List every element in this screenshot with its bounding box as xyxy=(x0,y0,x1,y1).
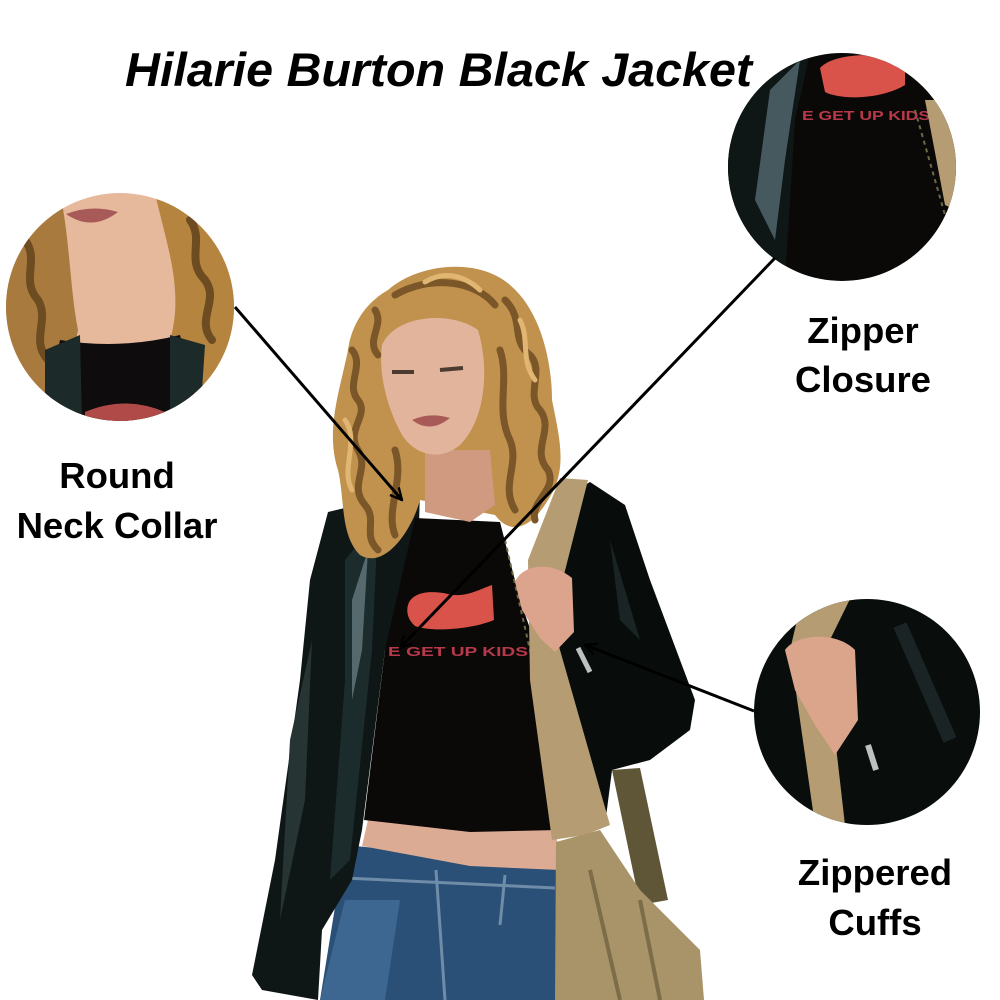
detail circle: zippered cuffs xyxy=(754,599,980,825)
arrow: zipper xyxy=(400,258,775,648)
bag strap and body xyxy=(528,478,610,840)
tee graphic xyxy=(407,585,494,629)
hair curls xyxy=(352,283,550,550)
arrow: collar xyxy=(235,307,402,500)
label: zipper closure: Zipper xyxy=(807,310,919,351)
jacket right sleeve xyxy=(548,482,695,830)
label: zippered cuffs: Cuffs xyxy=(828,902,922,943)
arrow: cuffs xyxy=(585,645,754,711)
label: round neck collar: Neck Collar xyxy=(17,505,217,546)
detail circle: round neck collar xyxy=(6,193,234,421)
back bag strap xyxy=(612,768,668,905)
figure: woman in black jacket xyxy=(252,267,704,1000)
tee zipper edge xyxy=(505,540,552,800)
jeans xyxy=(320,845,560,1000)
label: round neck collar: Round xyxy=(59,455,175,496)
label: zippered cuffs: Zippered xyxy=(798,852,952,893)
hair xyxy=(333,267,561,558)
face and neck xyxy=(425,450,495,522)
title: Hilarie Burton Black Jacket xyxy=(125,43,754,96)
hand xyxy=(515,567,574,652)
black tee xyxy=(364,518,558,832)
figure: woman in black jacket: E GET UP KIDS xyxy=(388,644,528,659)
cuff zipper xyxy=(578,648,590,672)
jacket left side xyxy=(252,490,420,1000)
detail circle: zipper closure xyxy=(728,53,956,281)
detail circle: zipper closure: E GET UP KIDS xyxy=(802,108,930,123)
bare midriff xyxy=(362,820,560,870)
label: zipper closure: Closure xyxy=(795,359,931,400)
